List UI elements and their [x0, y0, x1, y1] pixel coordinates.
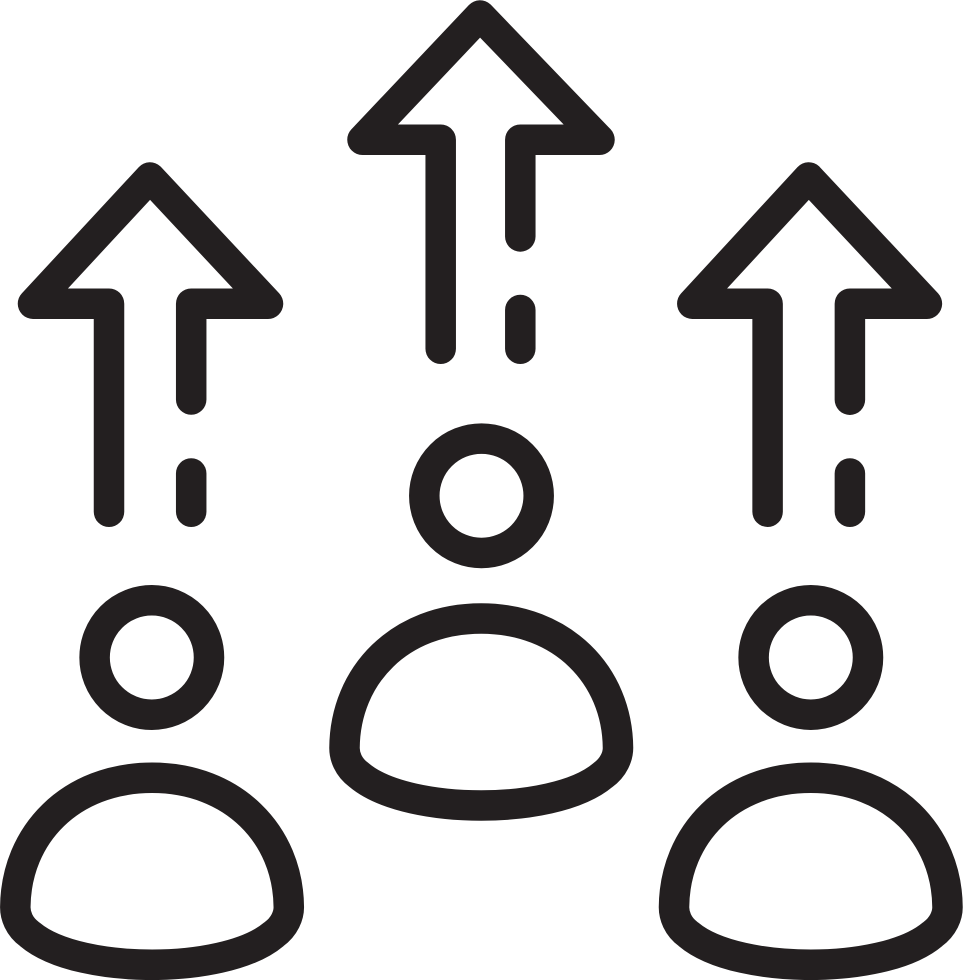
arrow: center: [362, 16, 600, 349]
figure: left person with arrow: [15, 178, 289, 965]
body: left person: [15, 778, 289, 965]
figure: center person with arrow: [344, 16, 618, 806]
arrow: right: [692, 178, 927, 512]
head: center person: [424, 439, 539, 553]
body: center person: [344, 618, 618, 806]
arrow: left: [33, 178, 268, 512]
body: right person: [674, 778, 948, 965]
head: right person: [754, 600, 868, 715]
figure: right person with arrow: [674, 178, 948, 965]
head: left person: [95, 600, 209, 715]
